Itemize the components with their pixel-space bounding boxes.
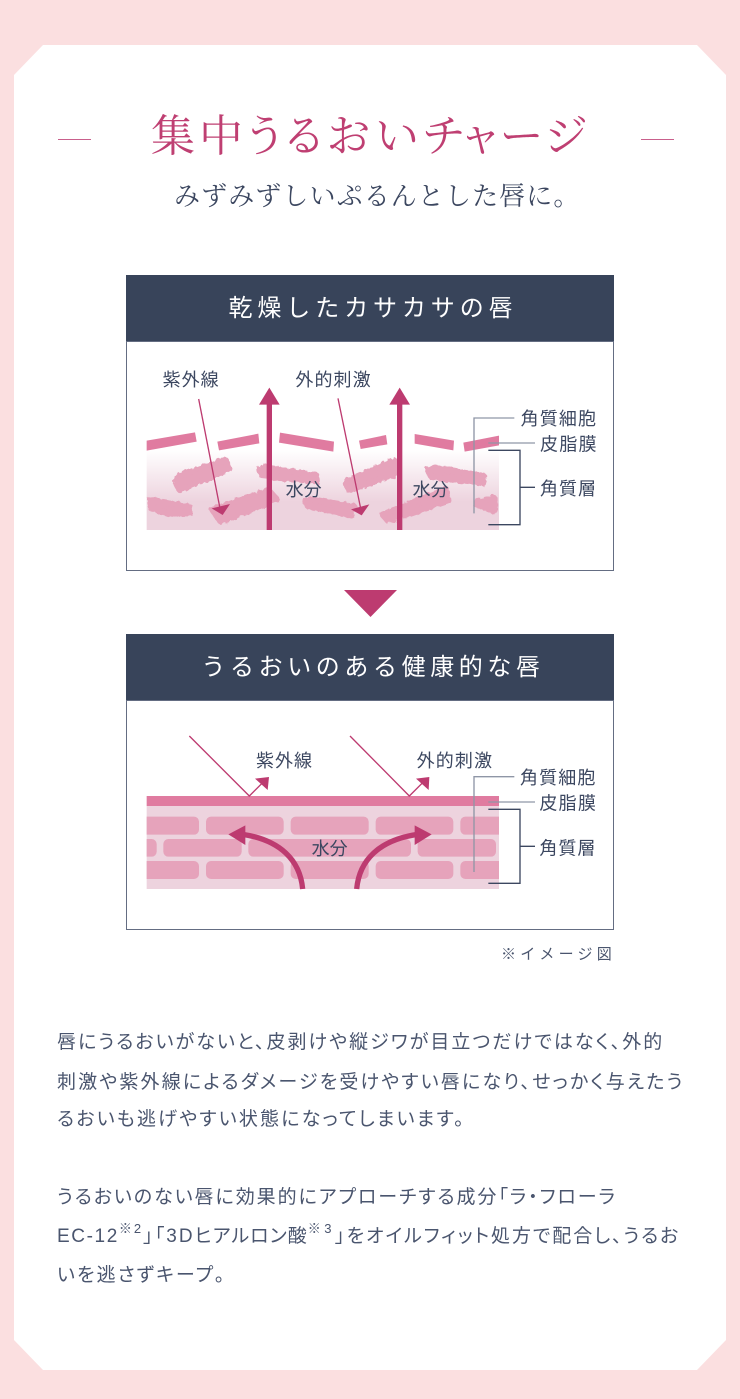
paragraph 1: るおいも逃げやすい状態になってしまいます。 (57, 1109, 466, 1130)
paragraph 2 (57, 1187, 680, 1286)
label: sebum film: 皮脂膜 (540, 435, 597, 455)
label: sebum film: 皮脂膜 (539, 794, 596, 814)
chart: healthy lips skin diagram (146, 736, 596, 890)
panel: healthy lips header: うるおいのある健康的な唇 (201, 654, 545, 681)
curved moisture arrow left (228, 825, 303, 889)
paragraph 1: 唇にうるおいがないと、皮剥けや縦ジワが目立つだけではなく、外的 (57, 1032, 664, 1053)
dry skin base layer (147, 450, 499, 530)
external stimulus arrow (338, 398, 369, 515)
title: 集中うるおいチャージ (151, 100, 589, 164)
brick cells (147, 817, 499, 879)
label: stratum corneum: 角質層 (540, 479, 596, 499)
label: moisture right: 水分 (413, 480, 449, 500)
continuous sebum film (147, 796, 499, 806)
paragraph 2: いを逃さずキープ。 (57, 1265, 226, 1286)
label: moisture: 水分 (312, 839, 348, 859)
label: external stimulus: 外的刺激 (295, 370, 371, 390)
curved moisture arrow right (357, 825, 432, 889)
reflected stimulus arrow (350, 736, 429, 796)
label: UV: 紫外線 (163, 370, 219, 390)
label: keratin cell: 角質細胞 (521, 409, 596, 429)
image note: ※イメージ図 (501, 946, 616, 963)
broken sebum film (147, 432, 499, 452)
label: stratum corneum: 角質層 (539, 838, 595, 858)
label: keratin cell: 角質細胞 (520, 768, 595, 788)
arrow: down triangle (344, 590, 397, 617)
panel: healthy lips header (126, 634, 614, 700)
moisture arrow right (389, 388, 410, 530)
subtitle: みずみずしいぷるんとした唇に。 (174, 176, 581, 213)
panel: dry lips header: 乾燥したカサカサの唇 (228, 295, 518, 322)
panel: healthy lips diagram box (126, 700, 614, 930)
label: moisture left: 水分 (286, 480, 322, 500)
paragraph 2: EC-12※2」「3Dヒアルロン酸※3」をオイルフィット処方で配合し、うるお (57, 1221, 680, 1247)
paragraph 1 (57, 1032, 684, 1130)
leader lines (474, 777, 535, 883)
moisture arrow left (259, 388, 280, 530)
UV arrow (199, 399, 230, 515)
panel: dry lips header (126, 275, 614, 341)
healthy base layer (147, 806, 499, 889)
paragraph 1: 刺激や紫外線によるダメージを受けやすい唇になり、せっかく与えたう (57, 1072, 684, 1093)
irregular dry cells (151, 460, 494, 521)
chart: dry lips skin diagram (146, 370, 597, 530)
leader lines (474, 418, 535, 525)
label: external stimulus: 外的刺激 (417, 751, 492, 771)
title decoration: left dash (58, 139, 91, 140)
title decoration: right dash (641, 139, 674, 140)
panel: dry lips diagram box (126, 341, 614, 571)
paragraph 2: うるおいのない唇に効果的にアプローチする成分「ラ・フローラ (57, 1187, 617, 1208)
label: UV: 紫外線 (256, 751, 312, 771)
reflected UV arrow (189, 736, 269, 796)
